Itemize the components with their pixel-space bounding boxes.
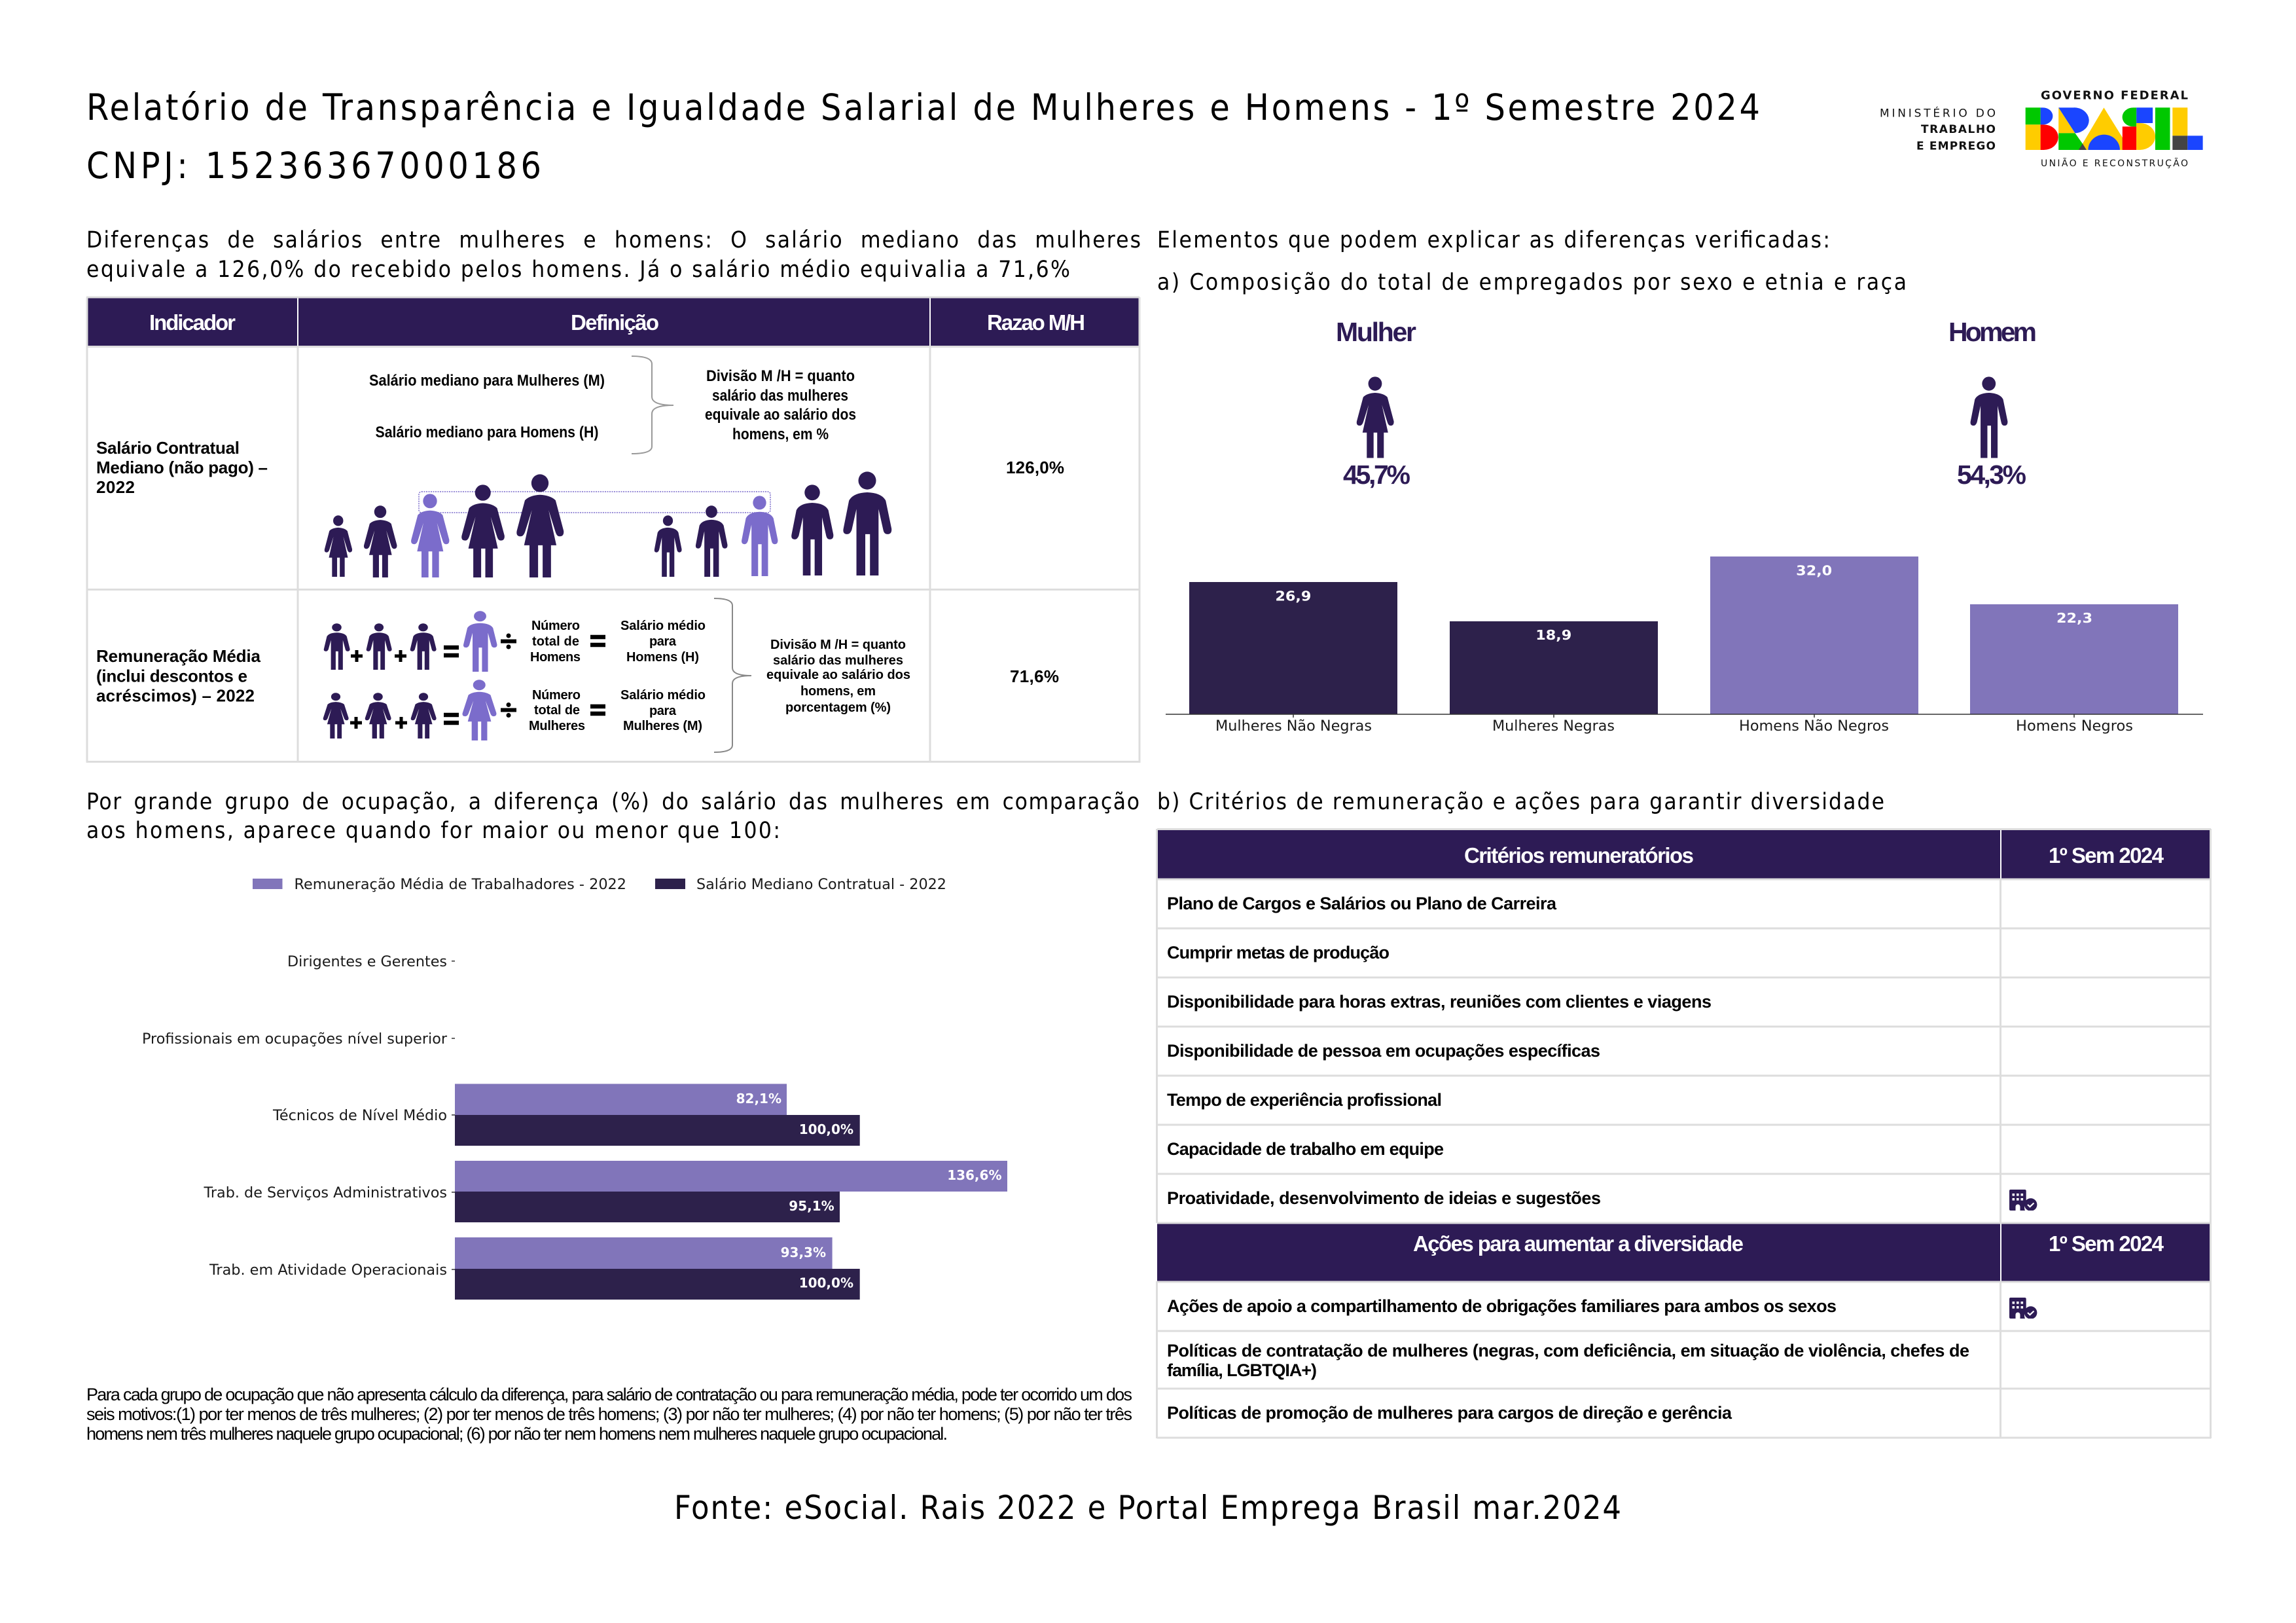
logo text: ministry: E EMPREGO bbox=[1916, 140, 1996, 153]
logo text: ministry: UNIÃO E RECONSTRUÇÃO bbox=[2041, 158, 2188, 169]
panel: Mulher share: Mulher bbox=[1336, 317, 1416, 347]
median division explanation bbox=[705, 367, 856, 443]
axis labels: Técnicos de Nível Médio bbox=[272, 1108, 447, 1124]
logo text: ministry: GOVERNO FEDERAL bbox=[2041, 89, 2188, 103]
diversity action rows: Políticas de contratação de mulheres (negras, com deficiência, em situação de violência, chefes de bbox=[1167, 1341, 1969, 1360]
table header: criteria: Critérios remuneratórios bbox=[1464, 843, 1694, 867]
icon: company check, shared obligations bbox=[2009, 1298, 2037, 1319]
intro text: salary differences: Diferenças de salários entre mulheres e homens: O salário mediano das mulheres bbox=[86, 227, 1141, 253]
bars: Técnicos de Nível Médio bbox=[455, 1084, 860, 1146]
heading: occupation groups: aos homens, aparece quando for maior ou menor que 100: bbox=[86, 818, 780, 844]
bar: Homens Não Negros: 32,0 bbox=[1796, 563, 1832, 579]
criteria rows: Plano de Cargos e Salários ou Plano de Carreira bbox=[1167, 894, 1557, 913]
bars: Trab. em Atividade Operacionais: 93,3% bbox=[781, 1245, 826, 1260]
table header: Definição bbox=[571, 310, 659, 335]
title: Relatório de Transparência e Igualdade Salarial de Mulheres e Homens - 1º Semestre 2024 bbox=[86, 86, 1760, 128]
axis labels: Profissionais em ocupações nível superior bbox=[142, 1031, 448, 1048]
table header: diversity actions: 1º Sem 2024 bbox=[2049, 1231, 2164, 1256]
panel: Mulher share bbox=[1336, 317, 1416, 490]
average formula: men: total de bbox=[532, 634, 579, 649]
table grid bbox=[86, 297, 1139, 763]
average formula: women: Número bbox=[532, 688, 581, 702]
average formula: women: Mulheres (M) bbox=[623, 719, 702, 733]
heading: explanatory elements: Elementos que podem explicar as diferenças verificadas: bbox=[1157, 227, 1830, 253]
axis labels: Trab. de Serviços Administrativos bbox=[203, 1185, 447, 1201]
average formula: men: Número bbox=[531, 619, 580, 633]
row label: median contractual salary: Salário Contratual bbox=[96, 438, 240, 458]
average division explanation bbox=[766, 638, 910, 715]
bar chart: occupation groups bbox=[142, 877, 1007, 1300]
value: average ratio: 71,6% bbox=[1010, 666, 1059, 686]
category labels bbox=[1215, 718, 2133, 735]
average formula: women: total de bbox=[534, 703, 580, 718]
median division explanation: Divisão M /H = quanto bbox=[706, 367, 855, 385]
bar chart: composition by sex and race bbox=[1166, 556, 2203, 735]
category labels: Homens Não Negros bbox=[1739, 718, 1889, 735]
panel: criteria table bbox=[1157, 829, 2211, 1438]
average division explanation: porcentagem (%) bbox=[785, 701, 891, 715]
row label: median contractual salary: Mediano (não pago) – bbox=[96, 458, 268, 477]
median marker box bbox=[419, 492, 770, 513]
icons: women ordered by salary bbox=[325, 474, 564, 577]
bars: Trab. de Serviços Administrativos bbox=[455, 1161, 1007, 1222]
table header: Razao M/H bbox=[987, 310, 1085, 335]
bar: Homens Negros bbox=[1970, 604, 2178, 714]
logo text: ministry bbox=[1880, 89, 2188, 169]
panel: indicator table bbox=[86, 297, 1139, 763]
average formula: women: Salário médio bbox=[620, 688, 706, 702]
intro text: salary differences bbox=[86, 227, 1141, 283]
median division explanation: equivale ao salário dos bbox=[705, 406, 856, 424]
table header: diversity actions: Ações para aumentar a diversidade bbox=[1413, 1231, 1744, 1256]
average division explanation: equivale ao salário dos bbox=[766, 668, 910, 682]
table header: diversity actions bbox=[1157, 1224, 2210, 1281]
category labels: Homens Negros bbox=[2016, 718, 2133, 735]
median division explanation: salário das mulheres bbox=[712, 387, 848, 405]
criteria rows: Cumprir metas de produção bbox=[1167, 943, 1390, 962]
median division explanation: homens, em % bbox=[732, 426, 829, 443]
table header bbox=[86, 298, 1139, 346]
bar: Mulheres Negras bbox=[1450, 621, 1658, 714]
row label: average remuneration: (inclui descontos e bbox=[96, 666, 247, 686]
average formula: men: Homens (H) bbox=[626, 650, 699, 665]
footnote bbox=[86, 1385, 1132, 1444]
average division explanation: Divisão M /H = quanto bbox=[770, 638, 906, 652]
logo: Ministério do Trabalho e Emprego / Governo Federal Brasil bbox=[1880, 89, 2203, 169]
diversity action rows bbox=[1167, 1296, 1969, 1423]
table grid bbox=[1157, 829, 2211, 1438]
source line: Fonte: eSocial. Rais 2022 e Portal Emprega Brasil mar.2024 bbox=[674, 1489, 1621, 1527]
diversity action rows: Ações de apoio a compartilhamento de obrigações familiares para ambos os sexos bbox=[1167, 1296, 1837, 1316]
brace: median bbox=[632, 356, 673, 454]
average formula: women: Mulheres bbox=[529, 719, 585, 733]
logo text: ministry: TRABALHO bbox=[1921, 123, 1996, 136]
median formula labels: Salário mediano para Homens (H) bbox=[376, 424, 598, 441]
criteria rows: Tempo de experiência profissional bbox=[1167, 1090, 1442, 1110]
bars: Trab. em Atividade Operacionais bbox=[455, 1237, 860, 1300]
bars: Técnicos de Nível Médio: 100,0% bbox=[799, 1122, 853, 1137]
bar: Mulheres Não Negras bbox=[1189, 582, 1397, 714]
chart legend: Remuneração Média de Trabalhadores - 2022 bbox=[295, 877, 626, 893]
criteria rows: Disponibilidade de pessoa em ocupações específicas bbox=[1167, 1041, 1600, 1061]
heading: occupation groups: Por grande grupo de ocupação, a diferença (%) do salário das mulheres em comparação bbox=[86, 789, 1139, 815]
row label: average remuneration: Remuneração Média bbox=[96, 646, 261, 666]
icon: man bbox=[1971, 376, 2007, 458]
icon: woman bbox=[1357, 376, 1394, 458]
average formula: men: Homens bbox=[530, 650, 581, 665]
footnote: homens nem três mulheres naquele grupo ocupacional; (6) por não ter nem homens nem mulheres naquele grupo ocupacional. bbox=[86, 1424, 948, 1444]
logo text: ministry: MINISTÉRIO DO bbox=[1880, 105, 1996, 120]
criteria rows: Capacidade de trabalho em equipe bbox=[1167, 1139, 1444, 1159]
bar: Mulheres Negras: 18,9 bbox=[1535, 627, 1571, 643]
diversity action rows: família, LGBTQIA+) bbox=[1167, 1360, 1317, 1380]
bars: Trab. em Atividade Operacionais: 100,0% bbox=[799, 1275, 853, 1291]
chart legend: Salário Mediano Contratual - 2022 bbox=[696, 877, 946, 893]
row label: median contractual salary bbox=[96, 438, 268, 497]
panel: Homem share bbox=[1948, 317, 2037, 490]
criteria rows: Proatividade, desenvolvimento de ideias e sugestões bbox=[1167, 1188, 1601, 1208]
title bbox=[86, 86, 1760, 187]
bar: Homens Não Negros bbox=[1710, 556, 1918, 714]
axis labels bbox=[142, 954, 455, 1279]
row label: average remuneration bbox=[96, 646, 261, 706]
heading: workforce composition: a) Composição do total de empregados por sexo e etnia e raça bbox=[1157, 270, 1907, 296]
criteria rows bbox=[1167, 894, 1712, 1208]
icons: men ordered by salary bbox=[655, 471, 891, 577]
average formula: men bbox=[324, 611, 706, 672]
panel: Mulher share: 45,7% bbox=[1343, 460, 1410, 490]
average division explanation: homens, em bbox=[800, 684, 876, 699]
average division explanation: salário das mulheres bbox=[773, 653, 903, 668]
axis labels: Dirigentes e Gerentes bbox=[287, 954, 447, 970]
footnote: seis motivos:(1) por ter menos de três mulheres; (2) por ter menos de três homens; (3) por não ter mulheres; (4) por não ter homens; (5) por não ter três bbox=[86, 1404, 1132, 1424]
bars: Trab. de Serviços Administrativos: 95,1% bbox=[789, 1198, 834, 1214]
title: CNPJ: 15236367000186 bbox=[86, 145, 541, 187]
brace: average bbox=[714, 598, 751, 752]
panel: Homem share: Homem bbox=[1948, 317, 2037, 347]
row label: median contractual salary: 2022 bbox=[96, 477, 135, 497]
median formula labels: Salário mediano para Mulheres (M) bbox=[369, 372, 605, 390]
bar: Mulheres Não Negras: 26,9 bbox=[1275, 588, 1311, 604]
value: median ratio: 126,0% bbox=[1006, 458, 1064, 477]
bar: Homens Negros: 22,3 bbox=[2056, 610, 2092, 626]
heading: occupation groups bbox=[86, 789, 1139, 844]
axis labels: Trab. em Atividade Operacionais bbox=[209, 1262, 447, 1279]
table header: criteria bbox=[1157, 830, 2210, 879]
icon: company check, proactivity bbox=[2009, 1190, 2037, 1211]
diversity action rows: Políticas de promoção de mulheres para cargos de direção e gerência bbox=[1167, 1403, 1732, 1423]
category labels: Mulheres Não Negras bbox=[1215, 718, 1372, 735]
row label: average remuneration: acréscimos) – 2022 bbox=[96, 686, 255, 706]
category labels: Mulheres Negras bbox=[1492, 718, 1615, 735]
heading: remuneration criteria: b) Critérios de remuneração e ações para garantir diversidade bbox=[1157, 789, 1884, 815]
average formula: men: para bbox=[649, 634, 677, 649]
intro text: salary differences: equivale a 126,0% do recebido pelos homens. Já o salário médio equivalia a 71,6% bbox=[86, 257, 1070, 283]
table header: Indicador bbox=[149, 310, 236, 335]
panel: Homem share: 54,3% bbox=[1957, 460, 2026, 490]
chart legend bbox=[253, 877, 946, 893]
average formula: women: para bbox=[649, 704, 677, 718]
criteria rows: Disponibilidade para horas extras, reuniões com clientes e viagens bbox=[1167, 992, 1712, 1012]
average formula: women bbox=[323, 680, 706, 740]
bars: Técnicos de Nível Médio: 82,1% bbox=[736, 1091, 781, 1106]
bars: Trab. de Serviços Administrativos: 136,6% bbox=[947, 1167, 1001, 1183]
logo mark: BRASIL bbox=[2026, 107, 2203, 150]
table header: criteria: 1º Sem 2024 bbox=[2049, 843, 2164, 867]
average formula: men: Salário médio bbox=[620, 619, 706, 633]
footnote: Para cada grupo de ocupação que não apresenta cálculo da diferença, para salário de contratação ou para remuneração média, pode ter ocorrido um dos bbox=[86, 1385, 1132, 1404]
median formula labels bbox=[369, 372, 605, 441]
